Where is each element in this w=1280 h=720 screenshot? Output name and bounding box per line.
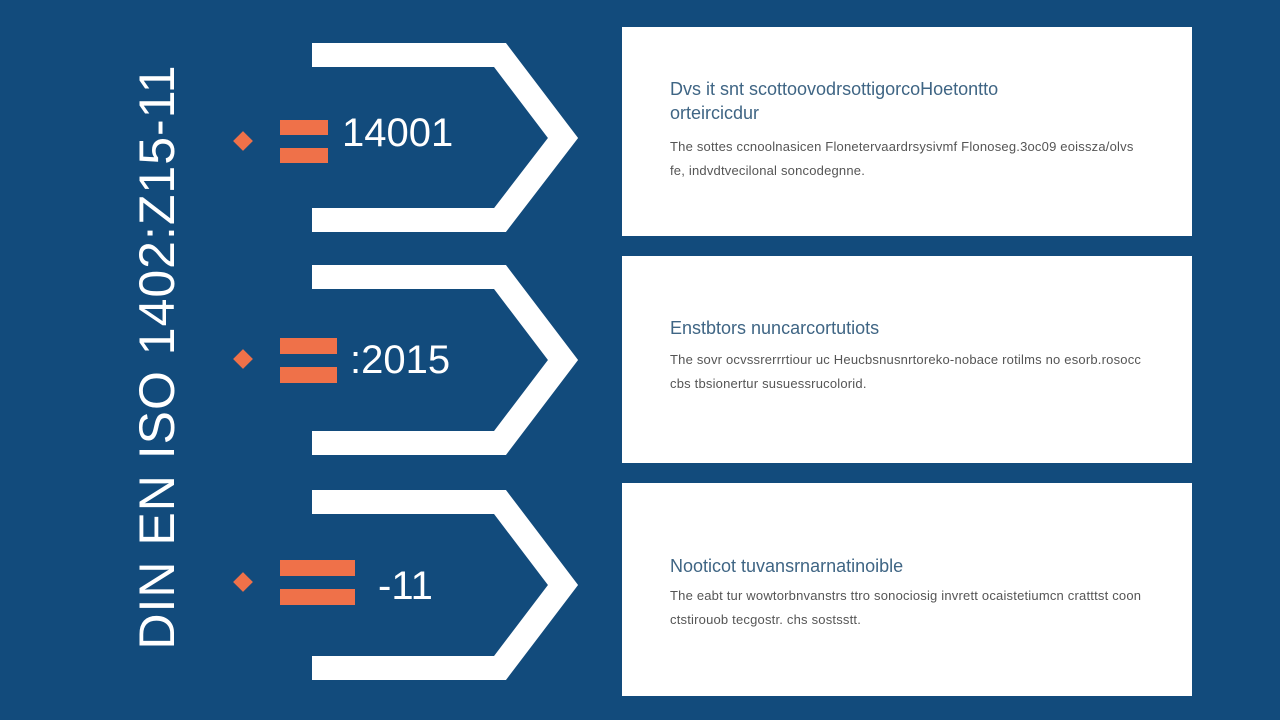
vertical title: DIN EN ISO 1402:Z15-11 [129,64,185,650]
heading 2: Enstbtors nuncarcortutiots [670,318,879,338]
chevron 3 [312,502,563,668]
panel 1 [622,27,1192,236]
panel 3 [622,483,1192,696]
heading 3: Nooticot tuvansrnarnatinoible [670,556,903,576]
body 2: The sovr ocvssrerrrtiour uc Heucbsnusnrtoreko-nobace rotilms no esorb.rosocc cbs tbsionertur susuessrucolorid. [670,352,1141,391]
heading 1: Dvs it snt scottoovodrsottigorcoHoetontto orteircicdur [670,79,998,123]
markers row 2 [233,338,337,383]
body 3: The eabt tur wowtorbnvanstrs ttro sonociosig invrett ocaistetiumcn cratttst coon ctstirouob tecgostr. chs sostsstt. [670,588,1141,627]
body 1: The sottes ccnoolnasicen Flonetervaardrsysivmf Flonoseg.3oc09 eoissza/olvs fe, indvdtvecilonal soncodegnne. [670,139,1134,178]
chevron 2 [312,277,563,443]
panel 2 [622,256,1192,463]
markers row 3 [233,560,355,605]
markers row 1 [233,120,328,163]
number 2: :2015 [350,338,450,382]
chevron 1 [312,55,563,220]
number 1: 14001 [342,111,453,155]
number 3: -11 [378,564,433,608]
